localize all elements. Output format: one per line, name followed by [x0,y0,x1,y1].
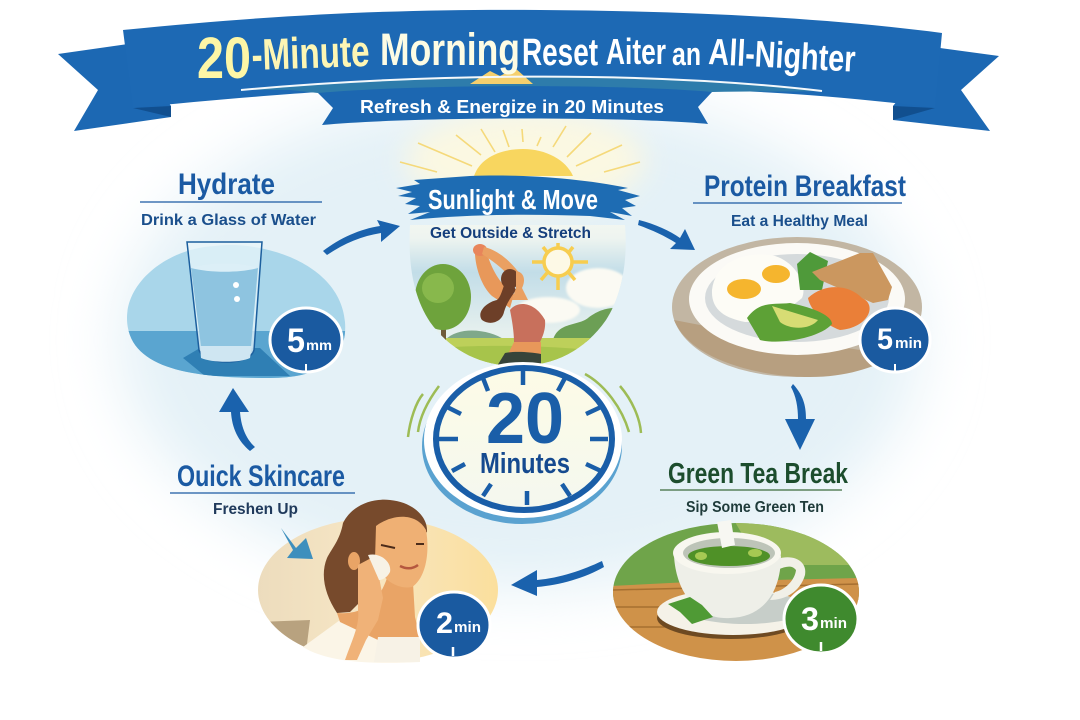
title: Reset [522,32,598,74]
title: Aiter [606,31,666,72]
time badge: 2 min [418,592,490,658]
step description: Drink a Glass of Water [141,212,316,229]
right ribbon tail [893,48,999,131]
illustration: glass of water [120,240,350,380]
time badge: 3 min: 3 [801,601,819,637]
step description: Eat a Healthy Meal [731,213,868,230]
step description: Get Outside & Stretch [430,225,591,242]
chest and neck [337,578,420,640]
title: All-Nighter [708,31,857,80]
step description: Sip Some Green Ten [686,499,824,516]
arrow: hydrate to sunlight [323,220,400,255]
cotton pad [368,554,390,580]
time badge: 5 min: min [895,335,922,352]
step title: Sunlight & Move [428,184,598,215]
step title: Green Tea Break [668,458,849,490]
step title: Ouick Skincare [177,460,345,493]
title: an [672,36,701,72]
icon: sun [474,149,573,176]
title: Morning [380,24,520,75]
brush banner [396,176,640,220]
arrow: tea to skincare [511,561,604,596]
illustration: cup of tea [610,520,865,665]
step: sunlight and move [396,126,640,370]
step: hydrate [120,168,350,380]
step: protein breakfast [672,170,930,377]
main ribbon [123,10,942,108]
illustration: woman applying skincare [255,500,500,665]
figure [475,254,514,308]
sun peek behind title [470,68,533,84]
clock label: Minutes [480,448,570,480]
hair [324,500,427,613]
arrow: sunlight to breakfast [638,220,695,250]
central clock [408,362,641,524]
illustration: breakfast plate [672,237,922,377]
title [197,24,857,91]
title: 20 [197,26,251,91]
time badge: 2 min: min [454,619,481,636]
step: green tea break [610,458,865,665]
eyes and mouth [381,544,424,548]
sun in sky [532,243,588,290]
time badge: 2 min: 2 [436,607,453,640]
subtitle: Refresh & Energize in 20 Minutes [360,97,664,117]
clock number: 20 [486,379,564,459]
arrow: skincare to hydrate [219,388,255,451]
time badge: 5 min: mm [306,337,332,353]
time badge: 3 min [784,585,858,653]
title: -Minute [251,27,370,80]
icon: sun rays [400,126,640,172]
time badge: 5 min: 5 [287,322,305,360]
subtitle ribbon [318,86,712,125]
hand and forearm [345,556,383,660]
face [375,517,427,587]
motion marks [408,374,641,437]
arrow: breakfast to tea [785,384,815,450]
time badge: 5 min [860,308,930,372]
time badge: 5 min: 5 [877,323,893,356]
left ribbon tail [58,44,171,131]
step description: Freshen Up [213,501,298,518]
step title: Protein Breakfast [704,170,906,203]
clock tick marks [439,371,608,505]
step: quick skincare [170,460,500,665]
step title: Hydrate [178,168,275,201]
ear [348,552,360,570]
scene: woman stretching [410,225,626,364]
banner ribbon [58,10,999,131]
small arrow [281,528,313,559]
time badge: 3 min: min [820,615,847,632]
time badge: 5 min [270,308,342,372]
